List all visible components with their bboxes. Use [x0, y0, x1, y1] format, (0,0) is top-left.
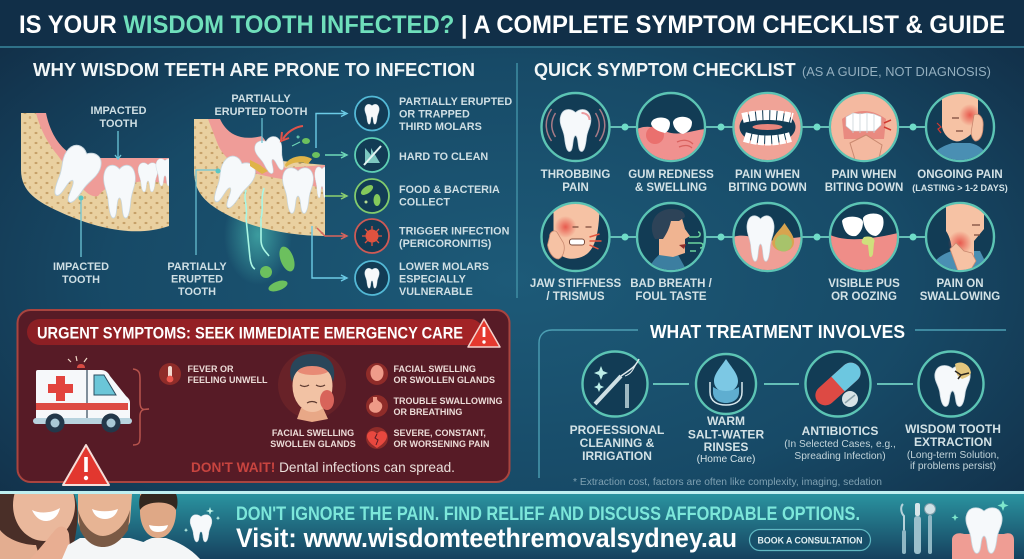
- label: swelling: OR SWOLLEN GLANDS: [394, 375, 495, 385]
- symptom: bad breath: [637, 203, 705, 271]
- treatment: extraction: [918, 352, 984, 416]
- banner text: DON'T IGNORE THE PAIN. FIND RELIEF AND DISCUSS AFFORDABLE OPTIONS.: [236, 504, 860, 525]
- label: pain on swallowing: PAIN ON: [936, 278, 984, 290]
- label: swallowing: TROUBLE SWALLOWING: [394, 396, 502, 406]
- label: visible pus: VISIBLE PUS: [828, 278, 900, 290]
- label: throbbing pain: THROBBING: [541, 169, 610, 181]
- bracket: [133, 369, 149, 445]
- icon: dental tools: [901, 503, 936, 554]
- label: fever: FEVER OR: [188, 364, 234, 374]
- label: visible pus: OR OOZING: [831, 291, 897, 303]
- reason: trigger infection: (PERICORONITIS): [399, 238, 492, 250]
- symptom: jaw stiffness: [542, 203, 610, 271]
- icon: tooth: [184, 507, 220, 542]
- label: antibiotics: (In Selected Cases, e.g.,: [784, 439, 896, 450]
- treatment: cleaning: [582, 352, 648, 416]
- reason: partially erupted or trapped: [355, 96, 512, 133]
- label: partially erupted top: ERUPTED TOOTH: [215, 106, 308, 118]
- label: jaw stiffness: JAW STIFFNESS: [530, 278, 622, 290]
- icon: swelling: [366, 363, 388, 385]
- panel: banner: [0, 491, 1024, 559]
- label: extraction: WISDOM TOOTH: [905, 422, 1001, 436]
- label: extraction: (Long-term Solution,: [907, 450, 999, 461]
- label: gum redness: GUM REDNESS: [628, 169, 714, 181]
- icon: ambulance: [33, 356, 132, 432]
- label: bad breath: BAD BREATH /: [630, 278, 713, 290]
- icon: warning triangle large: [63, 445, 109, 485]
- label: swelling: FACIAL SWELLING: [394, 364, 476, 374]
- label: pain biting 1: PAIN WHEN: [735, 169, 800, 181]
- label: extraction: if problems persist): [910, 461, 996, 472]
- heading: quick symptom checklist: (AS A GUIDE, NOT DIAGNOSIS): [802, 64, 991, 79]
- reason: lower molars: ESPECIALLY: [399, 274, 467, 286]
- label: throbbing pain: PAIN: [562, 182, 589, 194]
- reason: lower molars: LOWER MOLARS: [399, 261, 489, 273]
- label: fever: FEELING UNWELL: [188, 375, 268, 385]
- symptom: abscess: [734, 203, 802, 271]
- symptom: ongoing pain: [926, 93, 994, 161]
- reason: partially erupted or trapped: THIRD MOLARS: [399, 121, 482, 133]
- heading: why wisdom teeth: WHY WISDOM TEETH ARE PRONE TO INFECTION: [33, 60, 475, 80]
- arrows to reasons: [312, 110, 347, 281]
- reason: hard to clean: [355, 138, 488, 172]
- label: bad breath: FOUL TASTE: [635, 291, 707, 303]
- label: swallowing: OR BREATHING: [394, 407, 462, 417]
- diagram: partially erupted tooth jaw: [194, 118, 329, 294]
- icon: tooth in gum: [952, 500, 1014, 559]
- text: don't wait: DON'T WAIT! Dental infections can spread.: [191, 459, 455, 475]
- label: impacted tooth bottom: TOOTH: [62, 274, 100, 286]
- label: jaw stiffness: / TRISMUS: [546, 291, 605, 303]
- diagram: impacted tooth jaw: [21, 113, 174, 257]
- urgent header pill: [27, 319, 483, 345]
- label: salt water: WARM: [707, 414, 745, 428]
- label: pain biting 2: BITING DOWN: [825, 182, 903, 194]
- icon: fever: [159, 363, 181, 385]
- label: antibiotics: ANTIBIOTICS: [802, 424, 878, 438]
- label: facial swelling: SWOLLEN GLANDS: [270, 439, 356, 449]
- label: gum redness: & SWELLING: [635, 182, 707, 194]
- treatment: salt water: [696, 354, 756, 414]
- label: salt water: (Home Care): [697, 454, 755, 465]
- button: BOOK A CONSULTATION: [758, 536, 862, 546]
- button: [750, 530, 870, 550]
- banner url: Visit: www.wisdomteethremovalsydney.au: [236, 523, 737, 553]
- reason: partially erupted or trapped: OR TRAPPED: [399, 108, 470, 120]
- label: pain on swallowing: SWALLOWING: [920, 291, 1000, 303]
- label: cleaning: PROFESSIONAL: [570, 423, 664, 437]
- reason: trigger infection: TRIGGER INFECTION: [399, 226, 510, 238]
- reason: food and bacteria: [355, 179, 500, 213]
- divider: [516, 63, 518, 298]
- photo: smiling people: [0, 494, 200, 559]
- label: antibiotics: [784, 424, 896, 462]
- reason: lower molars: VULNERABLE: [399, 286, 473, 298]
- heading: treatment: WHAT TREATMENT INVOLVES: [650, 322, 905, 342]
- symptom: pain biting 2: [830, 93, 898, 163]
- icon: swallowing: [366, 395, 388, 417]
- icon: warning triangle small: [468, 319, 500, 347]
- icon: face: [278, 351, 346, 422]
- label: pain biting 2: PAIN WHEN: [832, 169, 896, 181]
- header band: [0, 0, 1024, 48]
- symptom: pain biting 1: [734, 93, 802, 161]
- title: IS YOUR WISDOM TOOTH INFECTED? | A COMPLETE SYMPTOM CHECKLIST & GUIDE: [19, 11, 1005, 39]
- panel: urgent symptoms: [18, 310, 510, 485]
- label: facial swelling: FACIAL SWELLING: [272, 428, 354, 438]
- label: salt water: RINSES: [704, 440, 748, 454]
- label: severe pain: OR WORSENING PAIN: [394, 439, 489, 449]
- reason: hard to clean: HARD TO CLEAN: [399, 151, 488, 163]
- urgent heading: URGENT SYMPTOMS: SEEK IMMEDIATE EMERGENCY CARE: [37, 324, 463, 342]
- reason: food and bacteria: COLLECT: [399, 196, 450, 208]
- label: extraction: EXTRACTION: [914, 435, 992, 449]
- label: partially erupted bottom: PARTIALLY: [167, 261, 227, 273]
- label: impacted tooth top: IMPACTED: [90, 105, 147, 117]
- label: severe pain: SEVERE, CONSTANT,: [394, 428, 486, 438]
- label: ongoing pain: ONGOING PAIN: [917, 169, 1003, 181]
- footnote: * Extraction cost, factors are often like complexity, imaging, sedation: [573, 477, 882, 488]
- label: impacted tooth bottom: IMPACTED: [53, 261, 109, 273]
- heading: quick symptom checklist: QUICK SYMPTOM CHECKLIST: [534, 60, 796, 80]
- label: partially erupted top: PARTIALLY: [231, 93, 291, 105]
- label: cleaning: IRRIGATION: [582, 449, 652, 463]
- reason: trigger infection: [355, 219, 510, 253]
- label: partially erupted bottom: ERUPTED: [171, 274, 223, 286]
- icon: broken heart: [366, 427, 388, 449]
- label: impacted tooth top: TOOTH: [100, 118, 138, 130]
- label: antibiotics: Spreading Infection): [794, 451, 886, 462]
- label: cleaning: CLEANING &: [580, 436, 655, 450]
- frame: treatment: [539, 330, 1006, 478]
- symptom: visible pus: [830, 203, 898, 271]
- reason: food and bacteria: FOOD & BACTERIA: [399, 184, 500, 196]
- label: pain biting 1: BITING DOWN: [728, 182, 807, 194]
- treatment: antibiotics: [806, 352, 870, 416]
- label: extraction: [905, 422, 1001, 472]
- symptom: pain on swallowing: [926, 203, 994, 271]
- symptom: throbbing pain: [542, 93, 610, 161]
- connectors: treatment: [653, 383, 913, 385]
- reason: partially erupted or trapped: PARTIALLY ERUPTED: [399, 96, 512, 108]
- label: ongoing pain: (LASTING > 1-2 DAYS): [912, 183, 1008, 193]
- reason: lower molars: [355, 261, 489, 298]
- label: salt water: SALT-WATER: [688, 428, 764, 442]
- connectors: checklist: [610, 124, 927, 240]
- symptom: gum redness: [637, 93, 705, 161]
- label: partially erupted bottom: TOOTH: [178, 286, 216, 298]
